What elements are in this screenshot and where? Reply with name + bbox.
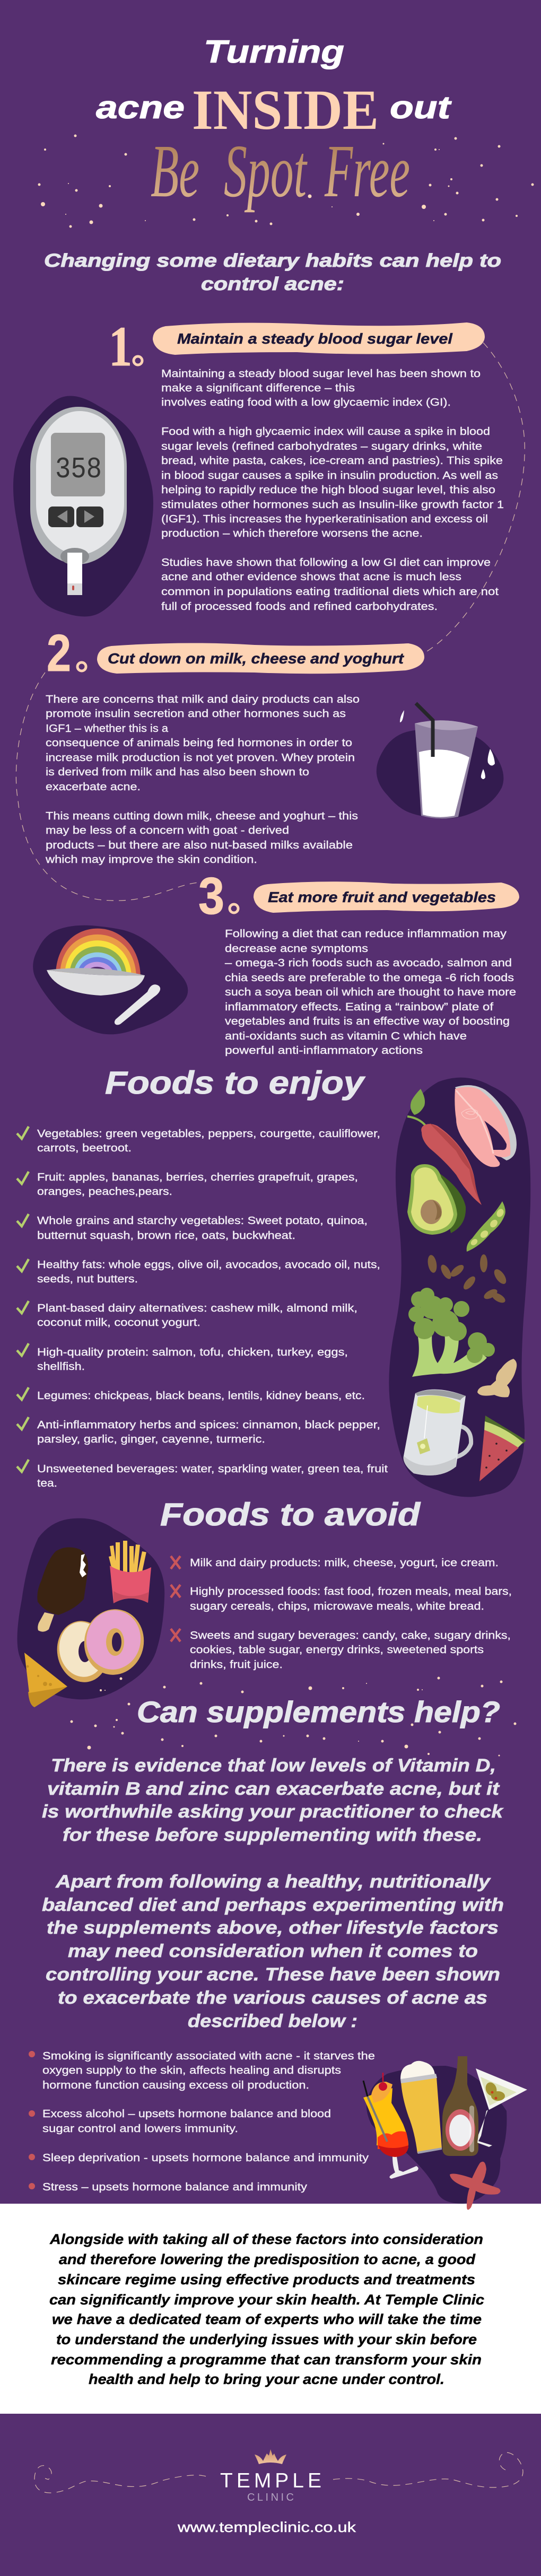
lifestyle factors list: Sleep deprivation - upsets hormone balance and immunity: [42, 2152, 369, 2164]
heading: foods to avoid: Foods to avoid: [160, 1497, 421, 1532]
icon: broccoli: [408, 1288, 495, 1377]
icon: french fries: [109, 1541, 151, 1603]
icon: edamame pod: [467, 1201, 505, 1252]
subheading: control acne:: [201, 274, 344, 294]
lifestyle paragraph: Apart from following a healthy, nutritionally: [55, 1872, 491, 1892]
section 1 body text: production – which therefore worsens the acne.: [161, 527, 423, 539]
foods to enjoy list: Legumes: chickpeas, black beans, lentils, kidney beans, etc.: [37, 1390, 365, 1402]
supplements paragraph: vitamin B and zinc can exacerbate acne, but it: [47, 1779, 500, 1799]
foods to enjoy list: carrots, beetroot.: [37, 1142, 132, 1154]
foods to enjoy list: coconut milk, coconut yogurt.: [37, 1317, 200, 1329]
icon: chocolate ice cream: [37, 1547, 88, 1632]
panel: alcohol illustrations: [363, 2056, 527, 2210]
icon: cheese wedge: [24, 1653, 67, 1707]
foods to enjoy list: Fruit: apples, bananas, berries, cherries grapefruit, grapes,: [37, 1172, 358, 1183]
website url: www.templeclinic.co.uk: [177, 2519, 356, 2535]
section 3 body text: – omega-3 rich foods such as avocado, salmon and: [225, 957, 512, 969]
section 1 body text: common in populations eating traditional diets which are not: [161, 586, 499, 598]
icon: chilli pepper: [407, 1089, 482, 1205]
title: [96, 34, 452, 142]
section 3 number: 3: [198, 867, 224, 925]
icon: beer glass: [400, 2061, 442, 2154]
section 2 number: 2: [47, 624, 71, 682]
section 1 heading pill: Maintain a steady blood sugar level: [177, 330, 453, 347]
lifestyle factors list: hormone function causing excess oil production.: [42, 2079, 309, 2091]
supplements paragraph: is worthwhile asking your practitioner to check: [42, 1802, 504, 1822]
section 1 body text: (IGF1). This increases the hyperkeratinisation and excess oil: [161, 513, 488, 525]
icon: glass of milk: [377, 703, 503, 819]
section 2 body text: exacerbate acne.: [46, 781, 141, 793]
supplements paragraph: [42, 1756, 504, 1845]
closing text: [49, 2231, 484, 2387]
title: Turning: [204, 34, 344, 69]
foods to avoid list: Highly processed foods: fast food, frozen meals, meal bars,: [190, 1585, 512, 1597]
supplements paragraph: for these before supplementing with these.: [63, 1825, 482, 1845]
section 2 body text: which may improve the skin condition.: [45, 853, 257, 866]
foods to enjoy list: tea.: [37, 1478, 57, 1489]
foods to enjoy list: shellfish.: [37, 1361, 85, 1373]
section 3 heading pill: Eat more fruit and vegetables: [268, 889, 496, 905]
script title: Be Spot Free: Free: [324, 129, 410, 213]
section 2 body text: products – but there are also nut-based milks available: [46, 839, 353, 851]
icon: salmon steak: [455, 1085, 517, 1167]
icon: martini glass: [476, 2068, 527, 2147]
lifestyle factors list: [29, 2050, 375, 2193]
section 3 heading pill: [254, 881, 519, 913]
lifestyle factors list: Stress – upsets hormone balance and immunity: [42, 2181, 308, 2193]
closing text: can significantly improve your skin health. At Temple Clinic: [49, 2292, 484, 2308]
foods to avoid list: drinks, fruit juice.: [190, 1658, 283, 1671]
title: INSIDE: [192, 79, 379, 142]
heading: foods to enjoy: Foods to enjoy: [105, 1065, 365, 1101]
section 1 heading pill: [153, 322, 485, 355]
closing text: Alongside with taking all of these factors into consideration: [49, 2231, 483, 2247]
lifestyle paragraph: the supplements above, other lifestyle factors: [47, 1918, 499, 1938]
logo: Temple Clinic: CLINIC: [247, 2492, 294, 2503]
sparkle dots: supplements: [70, 1677, 517, 1757]
closing text: to understand the underlying issues with your skin before: [56, 2332, 477, 2347]
foods to enjoy list: Plant-based dairy alternatives: cashew milk, almond milk,: [37, 1303, 357, 1314]
section 1 body text: acne and other evidence shows that acne is much less: [161, 571, 461, 583]
script title: Be Spot Free: [151, 129, 410, 213]
foods to enjoy list: Anti-inflammatory herbs and spices: cinnamon, black pepper,: [37, 1419, 380, 1431]
green check marks: [17, 1127, 29, 1472]
section 2 body text: This means cutting down milk, cheese and yoghurt – this: [46, 810, 358, 822]
sparkle dots: header: [38, 135, 534, 228]
closing text: health and help to bring your acne under control.: [89, 2371, 444, 2387]
section 3 body text: such a soya bean oil which are thought to have more: [225, 986, 516, 998]
section 1 body text: helping to rapidly reduce the high blood sugar level, this also: [161, 484, 495, 496]
logo: Temple Clinic: TEMPLE: [220, 2469, 321, 2492]
footer flourish right: [333, 2452, 523, 2487]
section 1 body text: full of processed foods and refined carbohydrates.: [161, 600, 438, 613]
foods to enjoy list: Whole grains and starchy vegetables: Sweet potato, quinoa,: [37, 1215, 368, 1227]
foods to avoid list: [190, 1557, 512, 1671]
icon: peanut: [477, 1359, 517, 1397]
foods to enjoy list: Unsweetened beverages: water, sparkling water, green tea, fruit: [37, 1463, 388, 1475]
icon: blood glucose meter: [13, 396, 153, 616]
closing text: skincare regime using effective products and treatments: [58, 2272, 475, 2287]
lifestyle paragraph: described below :: [188, 2011, 357, 2031]
lifestyle paragraph: [42, 1872, 504, 2031]
closing text: recommending a programme that can transform your skin: [51, 2352, 482, 2368]
section 2 body text: increase milk production is not yet proven. Whey protein: [46, 752, 355, 764]
section 1 body text: make a significant difference – this: [161, 382, 355, 394]
section 2 body text: IGF1 – whether this is a: [46, 722, 169, 735]
foods to avoid list: Milk and dairy products: milk, cheese, yogurt, ice cream.: [190, 1557, 499, 1569]
section 3 body text: anti-oxidants such as vitamin C which have: [225, 1030, 467, 1042]
icon: beans: [426, 1254, 509, 1305]
lifestyle paragraph: controlling your acne. These have been shown: [46, 1964, 500, 1985]
icon: mug of green tea: [404, 1390, 471, 1475]
foods to avoid list: cookies, table sugar, energy drinks, sweetened sports: [190, 1644, 484, 1656]
section 3 body text: [225, 928, 516, 1056]
section 1 body text: in blood sugar causes a spike in insulin production. As well as: [161, 469, 498, 482]
section 3 body text: vegetables and fruits is an effective way of boosting: [225, 1015, 510, 1027]
foods to enjoy list: seeds, nut butters.: [37, 1273, 138, 1285]
lifestyle paragraph: may need consideration when it comes to: [68, 1941, 478, 1961]
lifestyle factors list: Smoking is significantly associated with acne - it starves the: [42, 2050, 375, 2062]
foods to enjoy list: Healthy fats: whole eggs, olive oil, avocados, avocado oil, nuts,: [37, 1259, 380, 1271]
section 2 body text: is derived from milk and has also been shown to: [46, 766, 309, 778]
foods to enjoy list: Vegetables: green vegetables, peppers, courgette, cauliflower,: [37, 1128, 380, 1140]
icon: avocado: [407, 1164, 466, 1235]
section 1 body text: [161, 368, 504, 613]
foods to enjoy list: High-quality protein: salmon, tofu, chicken, turkey, eggs,: [37, 1347, 348, 1358]
section 1 body text: Studies have shown that following a low GI diet can improve: [161, 556, 491, 569]
foods to enjoy list: butternut squash, brown rice, oats, buckwheat.: [37, 1230, 295, 1242]
icon: rainbow in a bowl: [33, 925, 188, 1034]
section 3 body text: chia seeds are preferable to the omega -6 rich foods: [225, 972, 514, 984]
section 1 body text: stimulates other hormones such as Insulin-like growth factor 1: [161, 499, 504, 511]
section 1 body text: Maintaining a steady blood sugar level has been shown to: [161, 368, 481, 380]
icon: crown: [255, 2449, 286, 2464]
lifestyle factors list: Excess alcohol – upsets hormone balance and blood: [42, 2108, 331, 2120]
section 1 number: 1: [109, 316, 132, 378]
closing text: we have a dedicated team of experts who will take the time: [52, 2311, 482, 2327]
section 1 body text: Food with a high glycaemic index will cause a spike in blood: [161, 425, 490, 438]
subheading: Changing some dietary habits can help to: [44, 250, 501, 271]
section 2 heading pill: [97, 643, 424, 674]
section 1 body text: sugar levels (refined carbohydrates – sugary drinks, white: [161, 440, 482, 452]
icon: cocktail: [363, 2073, 418, 2179]
icon: wine bottle: [442, 2056, 478, 2156]
section 1 body text: involves eating food with a low glycaemic index (GI).: [161, 396, 451, 408]
lifestyle factors list: sugar control and lowers immunity.: [42, 2123, 238, 2135]
white closing band: [0, 2204, 541, 2414]
dashed connector 1 to 2: [427, 343, 525, 651]
foods to avoid list: Sweets and sugary beverages: candy, cake, sugary drinks,: [190, 1629, 511, 1641]
lifestyle factors list: oxygen supply to the skin, affects healing and disrupts: [42, 2064, 341, 2076]
section 2 body text: may be less of a concern with goat - derived: [46, 824, 289, 836]
subheading: [44, 250, 501, 294]
icon: red cross: [450, 2162, 501, 2210]
heading: can supplements help: Can supplements help?: [137, 1695, 500, 1728]
section 3 body text: Following a diet that can reduce inflammation may: [225, 928, 507, 940]
section 3 body text: inflammatory effects. Eating a “rainbow” plate of: [225, 1001, 493, 1013]
panel: healthy food illustrations: [389, 1078, 530, 1497]
panel: foods to avoid illustrations: [17, 1518, 164, 1707]
dashed connector 2 to 3: [16, 673, 198, 901]
lifestyle paragraph: balanced diet and perhaps experimenting with: [42, 1895, 504, 1915]
title: acne: [96, 90, 185, 125]
logo: Temple Clinic: [220, 2449, 321, 2503]
section 2 body text: promote insulin secretion and other hormones such as: [46, 708, 346, 720]
supplements paragraph: There is evidence that low levels of Vitamin D,: [51, 1756, 496, 1776]
section 2 heading pill: Cut down on milk, cheese and yoghurt: [108, 650, 405, 667]
section 3 body text: powerful anti-inflammatory actions: [225, 1044, 423, 1056]
foods to enjoy list: parsley, garlic, ginger, cayenne, turmeric.: [37, 1434, 265, 1445]
red cross marks: [171, 1556, 180, 1641]
section 3 body text: decrease acne symptoms: [225, 942, 368, 955]
section 2 body text: consequence of animals being fed hormones in order to: [46, 737, 352, 749]
section 1 body text: bread, white pasta, cakes, ice-cream and pastries). This spike: [161, 455, 503, 467]
section 2 body text: [45, 693, 360, 866]
icon: watermelon slice: [479, 1416, 526, 1481]
foods to enjoy list: oranges, peaches,pears.: [37, 1186, 172, 1198]
footer flourish left: [34, 2466, 206, 2493]
script title: Be Spot Free: Spot: [224, 129, 308, 213]
foods to avoid list: sugary cereals, chips, microwave meals, white bread.: [190, 1600, 484, 1612]
foods to enjoy list: [37, 1128, 388, 1489]
closing text: and therefore lowering the predisposition to acne, a good: [59, 2251, 476, 2267]
section 2 body text: There are concerns that milk and dairy products can also: [46, 693, 360, 705]
title: out: [390, 90, 452, 125]
script title: Be Spot Free: Be: [151, 129, 199, 213]
lifestyle paragraph: to exacerbate the various causes of acne as: [58, 1988, 487, 2008]
icon: blood glucose meter: 358: [55, 452, 102, 486]
icon: donuts: [53, 1604, 149, 1686]
